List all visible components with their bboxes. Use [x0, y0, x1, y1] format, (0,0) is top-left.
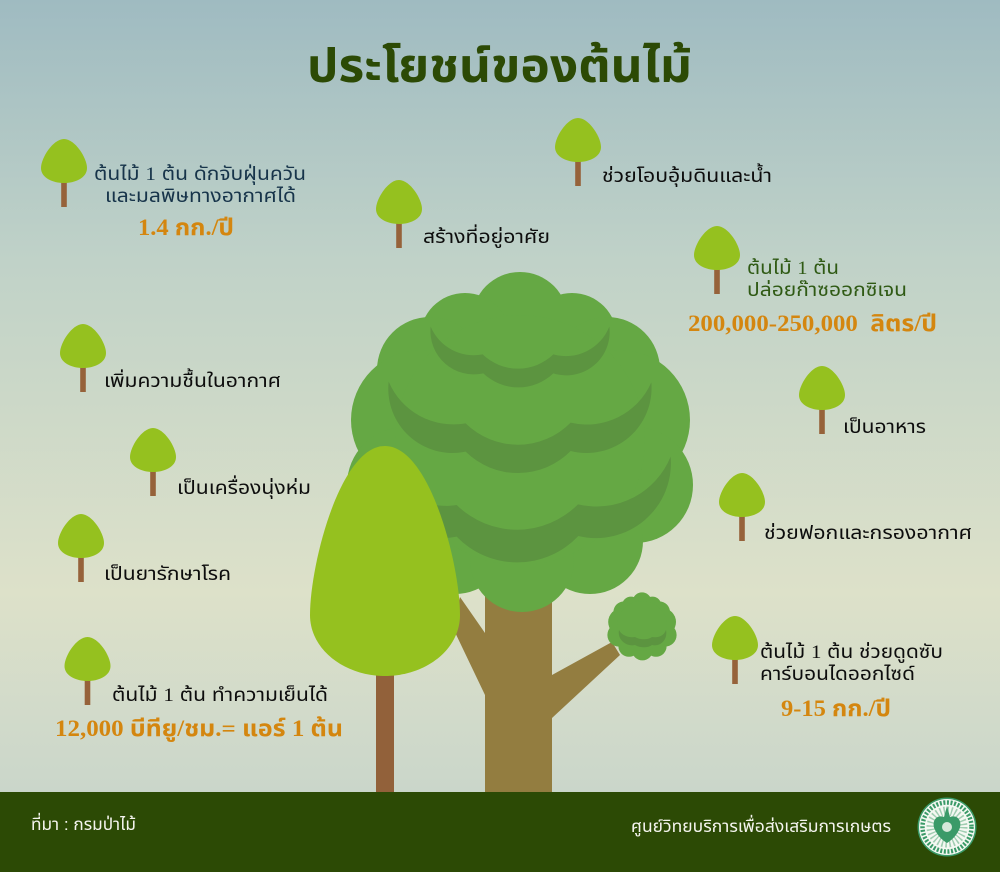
text: เพิ่มความชื้นในอากาศ	[104, 368, 281, 391]
value: 12,000 บีทียู/ชม.= แอร์ 1 ต้น	[55, 716, 343, 742]
icon: tree	[719, 473, 765, 541]
icon: department seal	[918, 798, 976, 856]
text: เป็นเครื่องนุ่งห่ม	[177, 475, 311, 499]
benefit: habitat	[376, 180, 550, 249]
icon: tree	[694, 226, 740, 294]
illustration: small bush on branch	[607, 592, 677, 660]
text: สร้างที่อยู่อาศัย	[423, 224, 550, 249]
text: ช่วยโอบอุ้มดินและน้ำ	[602, 163, 772, 187]
illustration: large tree	[347, 272, 693, 792]
text: ต้นไม้ 1 ต้น ดักจับฝุ่นควัน	[94, 163, 306, 185]
text line 2: คาร์บอนไดออกไซด์	[760, 663, 915, 684]
value: 200,000-250,000 ลิตร/ปี	[688, 311, 937, 336]
text: เป็นยารักษาโรค	[104, 563, 231, 584]
text: ต้นไม้ 1 ต้น ทำความเย็นได้	[112, 684, 328, 706]
benefit: dust capture	[41, 139, 306, 240]
illustration: lime tree in front	[310, 446, 460, 792]
text: ต้นไม้ 1 ต้น	[747, 257, 839, 279]
organisation: ศูนย์วิทยบริการเพื่อส่งเสริมการเกษตร	[631, 814, 891, 838]
text: เป็นอาหาร	[843, 416, 926, 437]
value: 1.4 กก./ปี	[138, 215, 234, 240]
icon: tree	[60, 324, 106, 392]
text line 2: และมลพิษทางอากาศได้	[105, 185, 296, 206]
icon: tree	[799, 366, 845, 434]
text: ต้นไม้ 1 ต้น ช่วยดูดซับ	[760, 641, 943, 664]
benefit: air filtering	[719, 473, 972, 543]
footer	[0, 792, 1000, 872]
icon: tree	[41, 139, 87, 207]
text: ช่วยฟอกและกรองอากาศ	[764, 522, 972, 543]
foliage	[347, 272, 693, 612]
icon: tree	[64, 637, 110, 705]
source: ที่มา : กรมป่าไม้	[31, 812, 136, 834]
foliage shadows	[388, 327, 671, 562]
icon: tree	[712, 616, 758, 684]
icon: tree	[555, 118, 601, 186]
benefit: soil and water	[555, 118, 772, 187]
benefit: humidity	[60, 324, 281, 392]
trunk and branches	[452, 590, 620, 792]
text line 2: ปล่อยก๊าซออกซิเจน	[747, 279, 907, 300]
benefit: cooling	[55, 637, 343, 742]
title: ประโยชน์ของต้นไม้	[307, 39, 692, 92]
icon: tree	[376, 180, 422, 248]
benefit: medicine	[58, 514, 231, 584]
benefit: oxygen	[688, 226, 937, 336]
benefit: carbon dioxide	[712, 616, 943, 721]
icon: tree	[58, 514, 104, 582]
icon: tree	[130, 428, 176, 496]
bush shadow	[619, 630, 666, 647]
benefit: food	[799, 366, 926, 437]
benefit: clothing	[130, 428, 311, 499]
value: 9-15 กก./ปี	[781, 696, 891, 721]
